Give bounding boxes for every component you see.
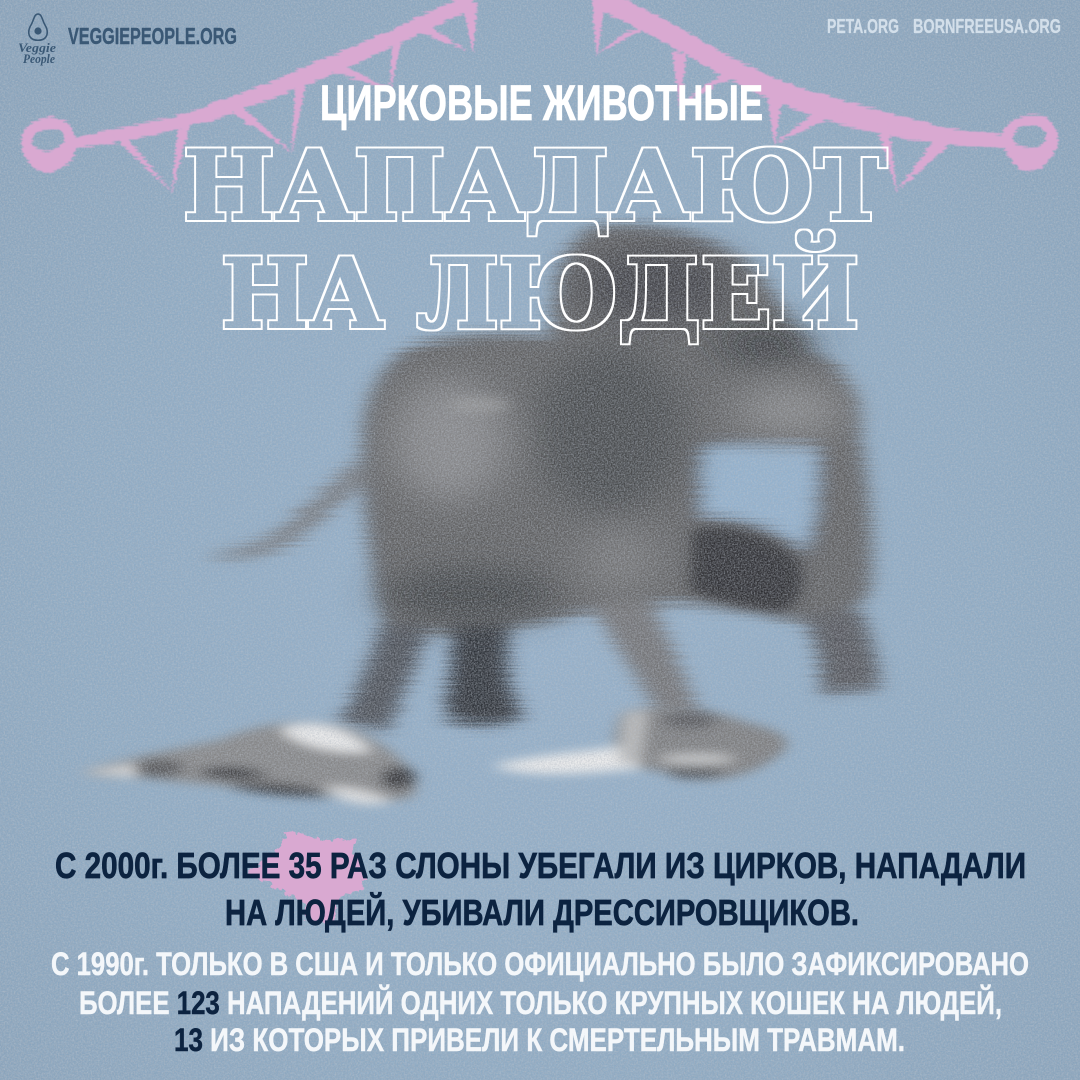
trampled figure left: [80, 722, 416, 805]
pink bunting left: [22, 0, 477, 192]
headline line 2: НА ЛЮДЕЙ: [221, 232, 859, 350]
statistic: big cats: [51, 946, 1029, 1058]
logo wordmark: Veggie: [18, 40, 56, 55]
headline line 1: НАПАДАЮТ: [183, 130, 887, 242]
source links: [827, 16, 1061, 38]
elephants line 2: НА ЛЮДЕЙ, УБИВАЛИ ДРЕССИРОВЩИКОВ.: [225, 891, 859, 933]
source: peta.org: PETA.ORG: [827, 16, 899, 38]
blurred elephant photo: [203, 225, 880, 730]
pink paint splat: [247, 830, 368, 924]
logo wordmark: [18, 40, 56, 66]
site link: veggiepeople.org: VEGGIEPEOPLE.ORG: [68, 23, 237, 49]
outlined headline: [183, 130, 887, 350]
statistic: elephants: [55, 845, 1026, 933]
pink bunting right: [592, 0, 1058, 192]
motion streaks on legs: [354, 640, 880, 710]
trampled figure right: [492, 707, 787, 779]
title: circus animals: ЦИРКОВЫЕ ЖИВОТНЫЕ: [320, 75, 763, 131]
big cats line 3: 13 ИЗ КОТОРЫХ ПРИВЕЛИ К СМЕРТЕЛЬНЫМ ТРАВМАМ.: [174, 1022, 905, 1058]
logo: Veggie People: [18, 14, 56, 66]
icon: avocado: [29, 14, 47, 40]
logo wordmark: People: [23, 52, 55, 66]
